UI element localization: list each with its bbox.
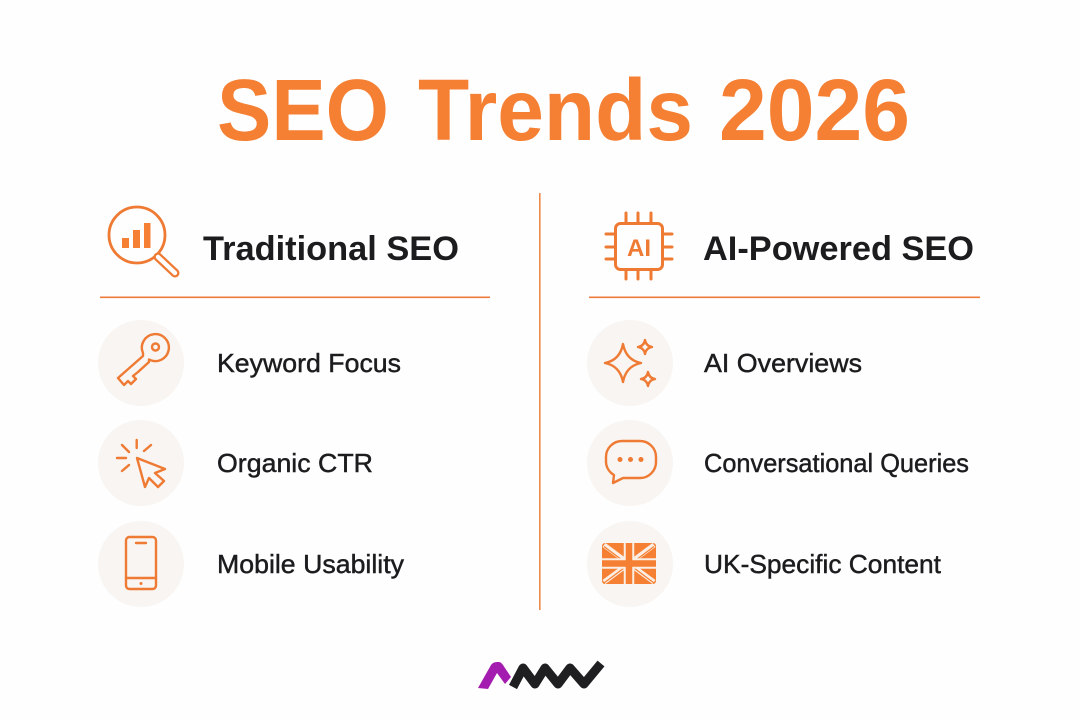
- title: 2026: [719, 62, 910, 159]
- icon: magnifier with bar chart: [109, 207, 175, 273]
- icon: AI chip: AI: [627, 235, 651, 262]
- icon: sparkles: [605, 340, 655, 386]
- item: keyword focus: [98, 320, 401, 406]
- heading: traditional SEO: Traditional SEO: [203, 230, 459, 268]
- icon: key: [118, 334, 169, 385]
- icon: phone: [126, 537, 156, 589]
- item: organic CTR: Organic CTR: [217, 448, 373, 478]
- title: Trends: [418, 62, 693, 159]
- item: conversational queries: [587, 420, 969, 506]
- icon: UK flag: [602, 543, 656, 584]
- icon: chat bubble: [606, 441, 656, 483]
- item: mobile usability: [98, 521, 404, 607]
- panel: AI-powered SEO: [587, 213, 980, 607]
- icon: cursor click: [117, 440, 165, 487]
- icon: AI chip: [606, 213, 672, 279]
- panel: traditional SEO: [98, 207, 490, 607]
- item: UK-specific content: UK-Specific Content: [704, 549, 942, 579]
- item: keyword focus: Keyword Focus: [217, 348, 401, 378]
- heading: AI-powered SEO: AI-Powered SEO: [703, 230, 974, 268]
- item: UK-specific content: [587, 521, 942, 607]
- logo: [478, 662, 601, 689]
- item: conversational queries: Conversational Queries: [704, 448, 969, 478]
- item: AI overviews: AI Overviews: [704, 348, 862, 378]
- item: mobile usability: Mobile Usability: [217, 549, 404, 579]
- title: SEO: [217, 62, 389, 159]
- item: AI overviews: [587, 320, 862, 406]
- item: organic CTR: [98, 420, 373, 506]
